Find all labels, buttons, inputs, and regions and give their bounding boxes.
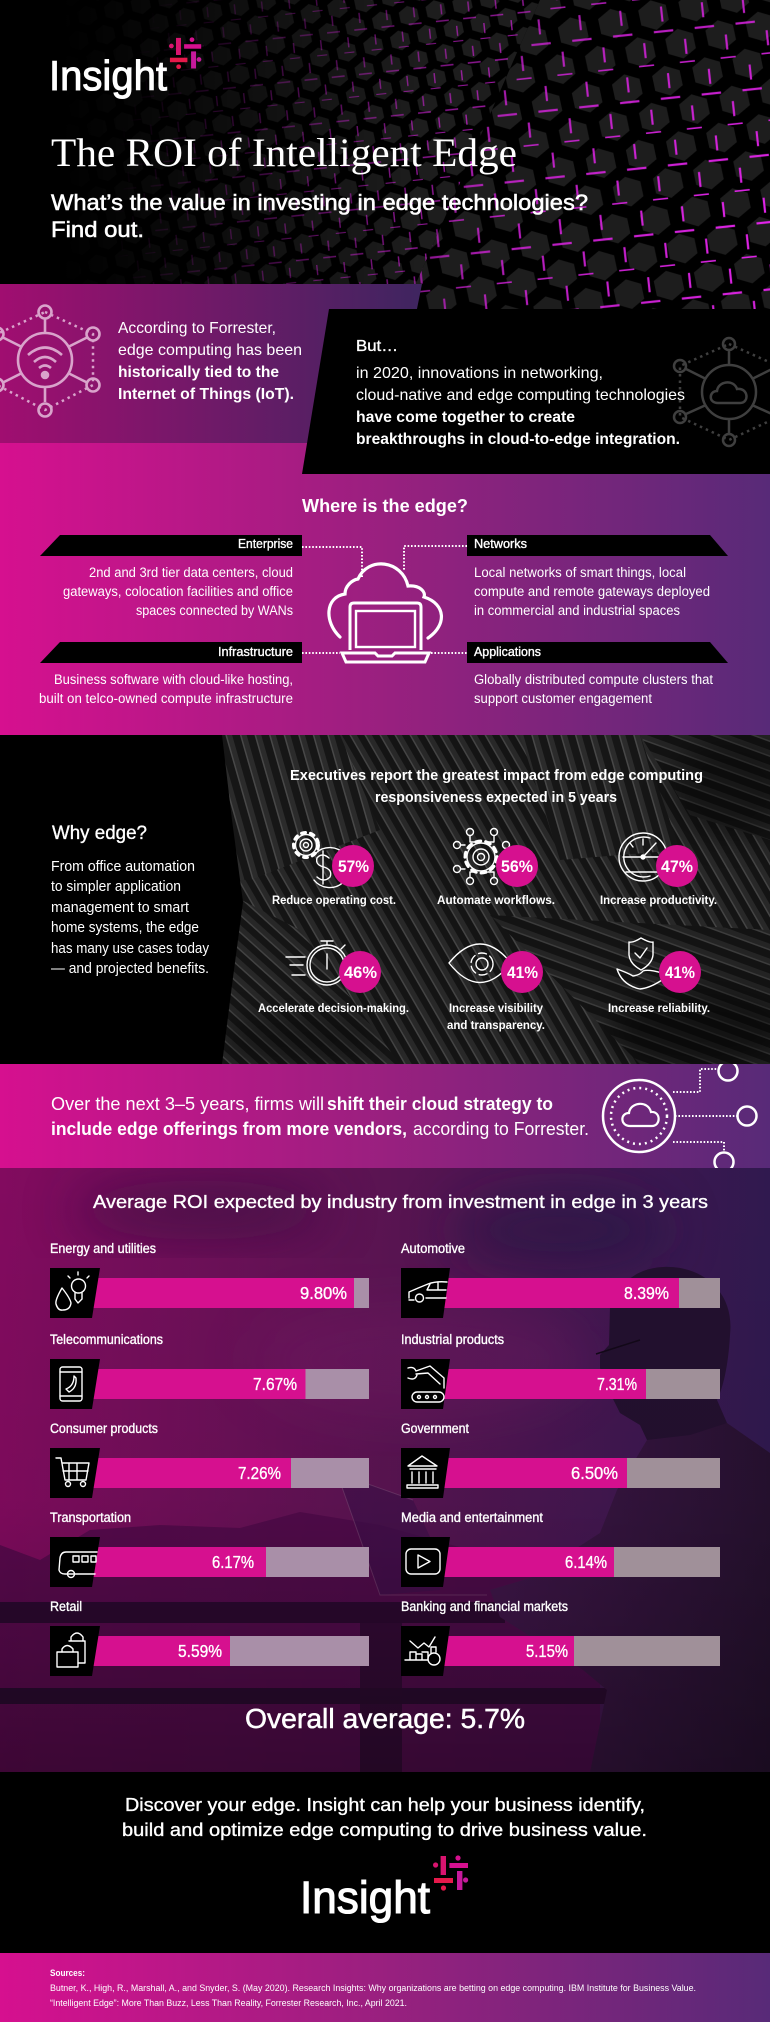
stat: 47% increase productivity: 47%: [661, 858, 693, 876]
stat: 57% reduce operating cost: 57%: [338, 858, 369, 876]
panel: cloud strategy band: according to Forrester.: [413, 1118, 589, 1139]
panel: But callout: in 2020, innovations in networking,: [356, 365, 603, 382]
block: Applications: support customer engagement: [474, 691, 652, 706]
icon: cloud network hub: [674, 338, 770, 446]
panel: why edge: From office automation: [51, 859, 195, 875]
block: Networks: [467, 535, 728, 618]
bar: energy and utilities: [50, 1241, 369, 1318]
Insight logo (bottom): [300, 1855, 468, 1923]
block: Infrastructure: [39, 642, 302, 706]
panel: But callout: have come together to create: [356, 409, 575, 426]
panel: call to action: Discover your edge. Insight can help your business identify,: [125, 1794, 645, 1815]
bar: industrial products: [401, 1332, 720, 1409]
panel: why edge: — and projected benefits.: [51, 961, 209, 977]
panel: Forrester intro: historically tied to the: [118, 364, 279, 381]
panel: Forrester intro: edge computing has been: [118, 342, 302, 359]
icon: wifi network hub: [0, 306, 100, 416]
panel: But callout: [302, 309, 770, 474]
block: Infrastructure: Business software with cloud-like hosting,: [54, 672, 293, 687]
panel: sources: Sources:: [50, 1968, 85, 1978]
stat: 46% accelerate decision-making: Accelerate decision-making.: [258, 1001, 409, 1015]
bar: telecommunications: 7.67%: [253, 1374, 297, 1394]
bar: banking and financial markets: [401, 1599, 720, 1676]
panel: call to action: build and optimize edge computing to drive business value.: [122, 1819, 647, 1840]
bar: automotive: [401, 1241, 720, 1318]
panel: why edge: to simpler application: [51, 879, 181, 895]
subtitle: [51, 190, 588, 242]
panel: Forrester intro: [0, 284, 422, 443]
block: Enterprise: [40, 535, 302, 618]
panel: call to action: [0, 1772, 770, 1953]
stat: 56% automate workflows: [437, 828, 555, 907]
bar: retail: [50, 1599, 369, 1676]
heading: where is the edge: Where is the edge?: [302, 495, 468, 516]
stat: 56% automate workflows: Automate workflows.: [437, 893, 555, 907]
bar: industrial products: 7.31%: [597, 1374, 637, 1394]
block: Networks: Networks: [474, 537, 527, 551]
Insight logo (bottom): Insight: [300, 1872, 430, 1923]
Insight logo (top): [49, 37, 201, 99]
bar: consumer products: 7.26%: [238, 1463, 281, 1483]
heading: executives report: responsiveness expected in 5 years: [375, 789, 617, 806]
panel: cloud strategy band: shift their cloud strategy to: [327, 1093, 553, 1114]
bar: consumer products: [50, 1421, 369, 1498]
icon: cloud with laptop and connectors: [302, 546, 467, 662]
panel: cloud strategy band: [0, 1062, 770, 1172]
block: Infrastructure: built on telco-owned compute infrastructure: [39, 691, 293, 706]
panel: cloud strategy band: Over the next 3–5 years, firms will: [51, 1093, 324, 1114]
bar: retail: Retail: [50, 1599, 82, 1614]
panel: why edge: has many use cases today: [51, 941, 210, 957]
stat: 47% increase productivity: Increase productivity.: [600, 893, 717, 907]
block: Enterprise: spaces connected by WANs: [136, 603, 293, 618]
stat: 41% increase reliability: 41%: [665, 964, 695, 982]
block: Networks: Local networks of smart things, local: [474, 565, 686, 580]
stat: 41% increase reliability: Increase reliability.: [608, 1001, 710, 1015]
subtitle: Find out.: [51, 217, 144, 242]
panel: Forrester intro: According to Forrester,: [118, 320, 276, 337]
bar: media and entertainment: Media and entertainment: [401, 1510, 543, 1525]
bar: automotive: Automotive: [401, 1241, 465, 1256]
stat: 41% increase visibility: Increase visibility: [449, 1001, 543, 1015]
panel: But callout: breakthroughs in cloud-to-edge integration.: [356, 431, 680, 448]
heading: executives report: [290, 767, 703, 806]
stat: 41% increase reliability: [608, 938, 710, 1015]
bar: telecommunications: [50, 1332, 369, 1409]
Insight logo (top): Insight: [49, 52, 167, 99]
bar: energy and utilities: Energy and utilities: [50, 1241, 156, 1256]
panel: where is the edge background: [0, 443, 770, 735]
block: Enterprise: 2nd and 3rd tier data centers, cloud: [89, 565, 293, 580]
block: Networks: in commercial and industrial spaces: [474, 603, 680, 618]
stat: 57% reduce operating cost: Reduce operating cost.: [272, 893, 396, 907]
bar: consumer products: Consumer products: [50, 1421, 158, 1436]
block: Infrastructure: Infrastructure: [218, 645, 293, 659]
panel: sources: “Intelligent Edge”: More Than Buzz, Less Than Reality, Forrester Research, Inc., April 2021.: [50, 1998, 407, 2008]
block: Enterprise: Enterprise: [238, 537, 293, 551]
block: Applications: [467, 642, 728, 706]
heading: executives report: Executives report the greatest impact from edge computing: [290, 767, 703, 784]
block: Networks: compute and remote gateways deployed: [474, 584, 710, 599]
bar: energy and utilities: 9.80%: [300, 1283, 347, 1303]
bar: government: 6.50%: [571, 1463, 618, 1483]
header background: hexagon pattern: [120, 0, 770, 309]
panel: sources: Butner, K., High, R., Marshall, A., and Snyder, S. (May 2020). Research Insights: Why organizations are betting on edge computing. IBM Institute for Business Value.: [50, 1983, 696, 1993]
stat: 41% increase visibility: and transparency.: [447, 1018, 545, 1032]
stat: 56% automate workflows: 56%: [501, 858, 533, 876]
bar: banking and financial markets: 5.15%: [526, 1641, 568, 1661]
panel: But callout: But…: [356, 338, 398, 355]
bar: retail: 5.59%: [178, 1641, 222, 1661]
stat: 46% accelerate decision-making: 46%: [344, 964, 377, 982]
panel: Forrester intro: Internet of Things (IoT).: [118, 386, 294, 403]
stat: 41% increase visibility: 41%: [507, 964, 538, 982]
bar: transportation: 6.17%: [212, 1552, 254, 1572]
bar: transportation: Transportation: [50, 1510, 131, 1525]
panel: cloud strategy band: include edge offerings from more vendors,: [51, 1118, 407, 1139]
title: The ROI of Intelligent Edge: [51, 130, 517, 175]
bar: transportation: [50, 1510, 369, 1587]
panel: why edge: [0, 735, 243, 1064]
panel: ROI background photo: [0, 1168, 770, 1772]
bar: media and entertainment: [401, 1510, 720, 1587]
bar: media and entertainment: 6.14%: [565, 1552, 607, 1572]
stat: 47% increase productivity: [600, 833, 717, 907]
stat: 57% reduce operating cost: [272, 832, 396, 907]
stat: 46% accelerate decision-making: [258, 941, 409, 1015]
bar: government: Government: [401, 1421, 469, 1436]
icon: cloud with connected nodes: [603, 1062, 756, 1172]
panel: why edge: Why edge?: [52, 822, 147, 844]
block: Applications: Applications: [474, 645, 541, 659]
panel: sources: [0, 1953, 770, 2022]
heading: average ROI: Average ROI expected by industry from investment in edge in 3 years: [93, 1191, 708, 1212]
panel: why edge: home systems, the edge: [51, 920, 199, 936]
bar: banking and financial markets: Banking and financial markets: [401, 1599, 568, 1614]
block: Enterprise: gateways, colocation facilities and office: [63, 584, 293, 599]
bar: automotive: 8.39%: [624, 1283, 669, 1303]
panel: why edge: management to smart: [51, 900, 189, 916]
panel: But callout: cloud-native and edge computing technologies: [356, 387, 685, 404]
bar: telecommunications: Telecommunications: [50, 1332, 163, 1347]
bar: industrial products: Industrial products: [401, 1332, 504, 1347]
panel: executive impact textured background: [215, 735, 770, 1070]
stat: 41% increase visibility: [447, 944, 545, 1032]
overall average: Overall average: 5.7%: [245, 1703, 525, 1734]
bar: government: [401, 1421, 720, 1498]
subtitle: What’s the value in investing in edge technologies?: [51, 190, 588, 215]
block: Applications: Globally distributed compute clusters that: [474, 672, 713, 687]
